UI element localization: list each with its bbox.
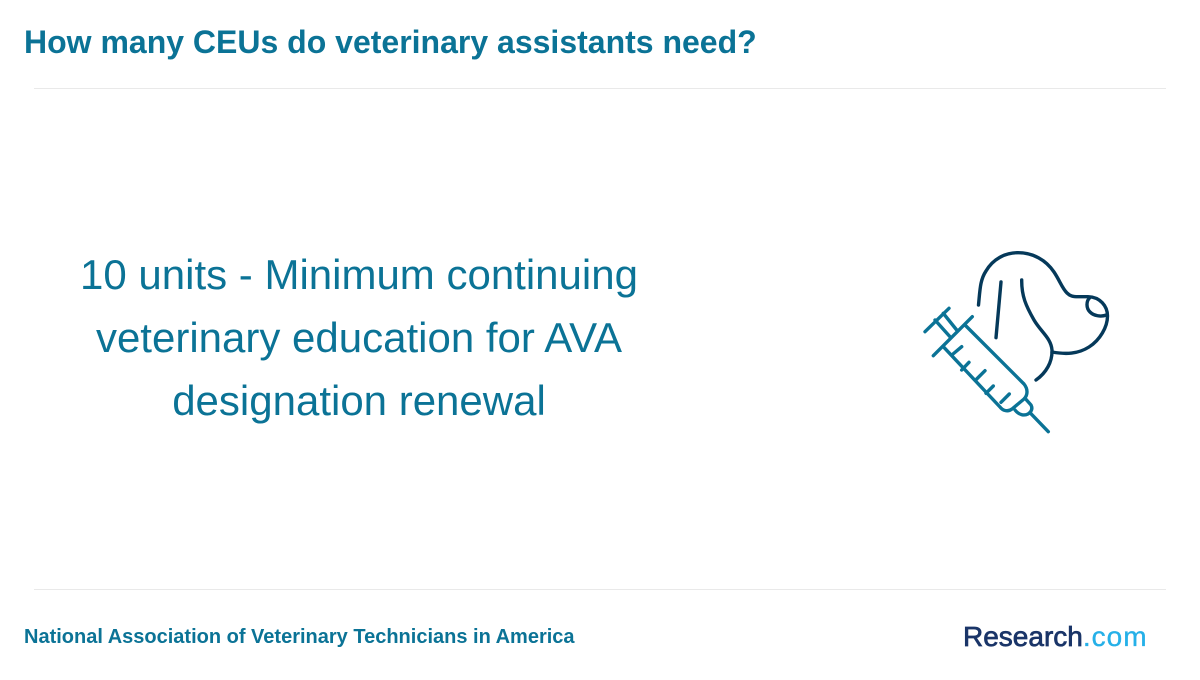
- source text: National Association of Veterinary Technicians in America: [24, 626, 575, 648]
- main statement: [80, 250, 638, 424]
- title: How many CEUs do veterinary assistants need?: [24, 24, 757, 60]
- main statement: designation renewal: [172, 376, 546, 424]
- main statement: veterinary education for AVA: [96, 314, 622, 360]
- icon: syringe: [925, 308, 1048, 432]
- main statement: 10 units - Minimum continuing: [80, 250, 638, 298]
- icon: dog and syringe: [923, 251, 1110, 434]
- logo: Research.com: Research.com: [963, 621, 1148, 652]
- icon: dog head: [978, 253, 1108, 380]
